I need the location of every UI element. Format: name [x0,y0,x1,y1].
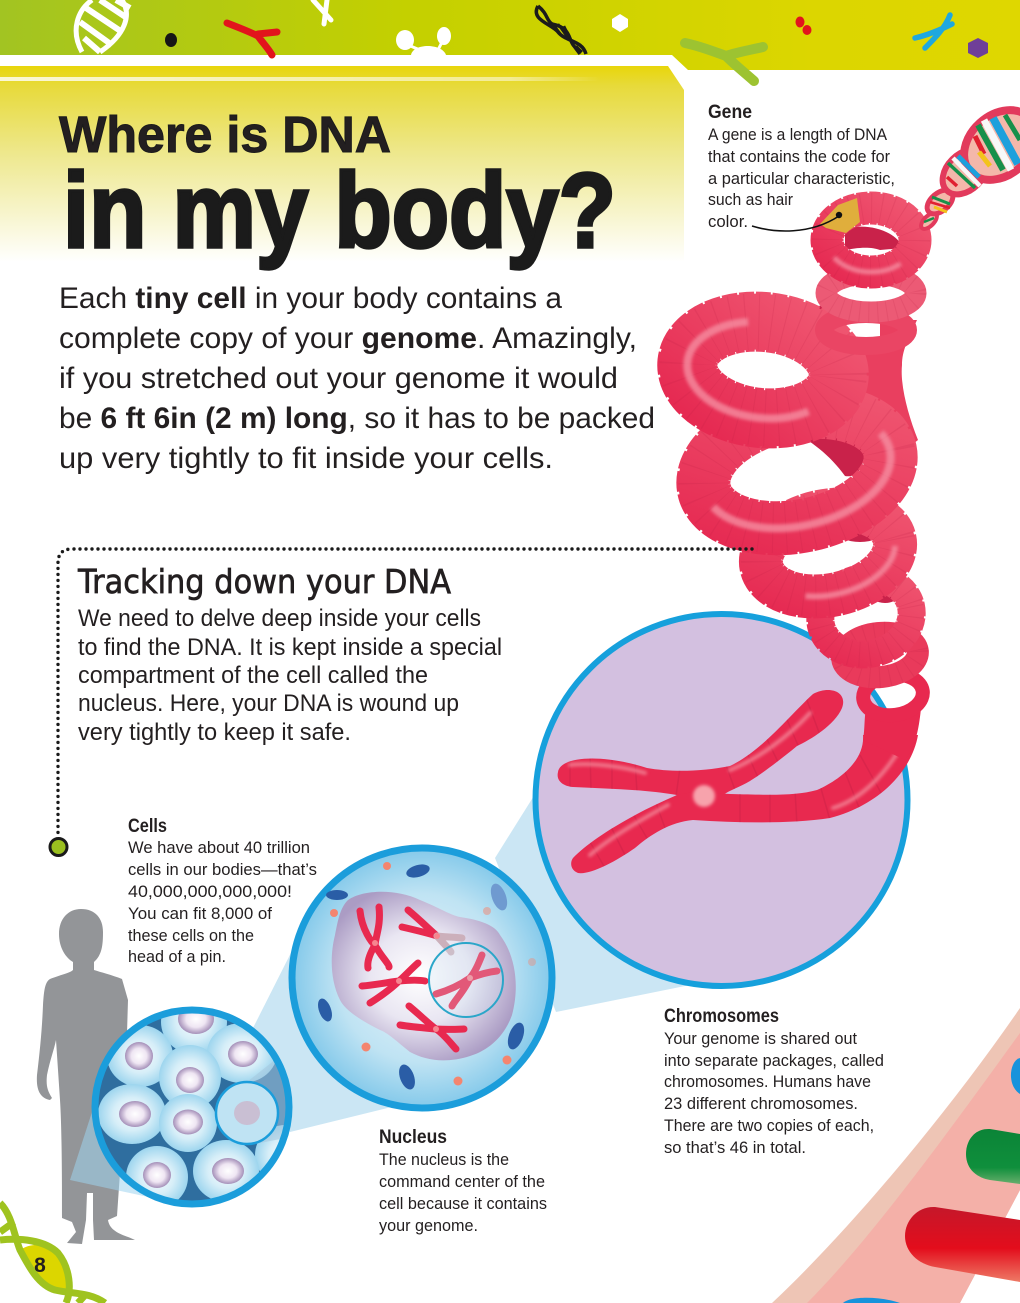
chromosomes text: Chromosomes [664,1006,779,1027]
gene pointer [752,212,842,231]
beam: cell to chromosome [495,735,690,1012]
chromosome [558,690,918,873]
section text: nucleus. Here, your DNA is wound up [78,690,459,717]
gene segment [820,198,860,233]
blue bar [1011,1058,1020,1094]
title [59,106,616,270]
cells text: cells in our bodies—that’s [128,861,317,879]
intro text [59,282,655,475]
gene text: Gene [708,102,752,123]
intro text: complete copy of your genome. Amazingly, [59,322,637,355]
coil dark back 1 [845,227,903,250]
helix lobes [918,96,1020,232]
section text: to find the DNA. It is kept inside a special [78,634,502,661]
coil dark back 3 [790,305,830,372]
nucleus text: command center of the [379,1173,545,1191]
coil dark back 5 [836,518,884,542]
nucleus highlight circle [429,943,503,1017]
chromatid lower [571,735,918,873]
section text: very tightly to keep it safe. [78,719,351,746]
DNA decoration and page number [0,1203,105,1303]
page number: 8 [34,1254,46,1277]
section heading: Tracking down your DNA [77,562,451,601]
beam: person to cells [70,1095,185,1205]
centromere [693,785,715,807]
chromosomes [360,907,497,1049]
strands [0,1203,105,1303]
gene text: a particular characteristic, [708,170,895,188]
chromosomes text: 23 different chromosomes. [664,1095,858,1113]
circle: cells [92,1006,292,1208]
backbone edge [772,1008,1020,1303]
cells text: head of a pin. [128,948,226,966]
coil loop 2 [826,274,916,312]
icon: black DNA [536,6,586,54]
coil loop 1 [827,208,915,272]
backbone [807,1033,1020,1303]
icon: white DNA [76,0,130,52]
chromosomes text: Your genome is shared out [664,1030,857,1048]
coil loop 5 [753,498,903,608]
nucleus text [379,1127,547,1235]
icon: white chromosome [313,0,331,24]
coil loop 3 [682,314,844,426]
coil column [822,320,918,470]
helix base pairs [924,115,1020,222]
silhouette: person [37,909,135,1244]
nucleus text: The nucleus is the [379,1151,509,1169]
icon: black dot [165,33,177,47]
circle: chromosome [536,614,908,986]
ribs [570,695,885,868]
dotted connector [50,549,752,856]
intro text: if you stretched out your genome it would [59,362,618,395]
intro text: Each tiny cell in your body contains a [59,282,562,315]
gene text [708,102,895,231]
chromosomes text: into separate packages, called [664,1052,884,1070]
gene text: that contains the code for [708,148,890,166]
chromosomes text: so that’s 46 in total. [664,1139,806,1157]
chromatid highlights [570,713,902,855]
title line 1: Where is DNA [59,106,391,163]
cells text: You can fit 8,000 of [128,905,272,923]
title panel background [0,66,684,262]
cells text: these cells on the [128,927,254,945]
chromosomes text: There are two copies of each, [664,1117,874,1135]
mitochondria [315,862,527,1092]
chromosomes text [664,1006,884,1157]
circle: cell [292,848,552,1108]
red bar [905,1207,1020,1282]
chromatid upper [558,690,843,795]
coil loop 7 [840,629,920,681]
beam: cells to cell [252,925,420,1132]
green bar [966,1129,1020,1184]
gene text: color. [708,213,748,231]
intro text: be 6 ft 6in (2 m) long, so it has to be packed [59,402,655,435]
icon: white virus [396,27,451,55]
DNA helix [918,96,1020,232]
cells text [128,816,317,966]
icon: purple hexagon [968,38,988,58]
yellow lobe [20,1245,69,1291]
centromeres [372,933,473,1032]
coil [682,198,925,760]
cells text: We have about 40 trillion [128,839,310,857]
gene text: A gene is a length of DNA [708,126,887,144]
nucleus text: cell because it contains [379,1195,547,1213]
title line 2: in my body? [63,152,616,270]
coil dark back 6 [869,581,901,603]
coil loop 6 [813,569,919,663]
cell group [98,1014,284,1200]
organelle dots [330,862,536,1086]
coil dark back 4 [790,422,864,476]
cells text: Cells [128,816,167,837]
section text [78,605,502,746]
blue bar lower [843,1298,900,1303]
coil loop 8 [861,671,925,719]
coil base [863,708,921,760]
coil loop 4 [692,395,902,545]
nucleus text: your genome. [379,1217,478,1235]
cells text: 40,000,000,000,000! [128,883,292,901]
chromosomes text: chromosomes. Humans have [664,1073,871,1091]
icon: red chromosome [227,23,277,55]
icon: green chromosome [685,43,763,81]
section text: compartment of the cell called the [78,662,428,689]
highlighted beam overlay [250,1062,286,1143]
nucleus text: Nucleus [379,1127,447,1148]
icon: red dumbbell [796,16,812,35]
icon: blue chromosome [915,15,952,48]
gene text: such as hair [708,191,793,209]
icon: white hexagon [612,14,628,32]
intro text: up very tightly to fit inside your cells. [59,442,553,475]
coil loop 2b [824,314,908,346]
header background [0,0,1020,70]
nucleus [332,892,516,1060]
section text: We need to delve deep inside your cells [78,605,481,632]
DNA decoration bottom right [772,1008,1020,1303]
header band [0,0,1020,81]
highlighted cell [216,1082,278,1144]
